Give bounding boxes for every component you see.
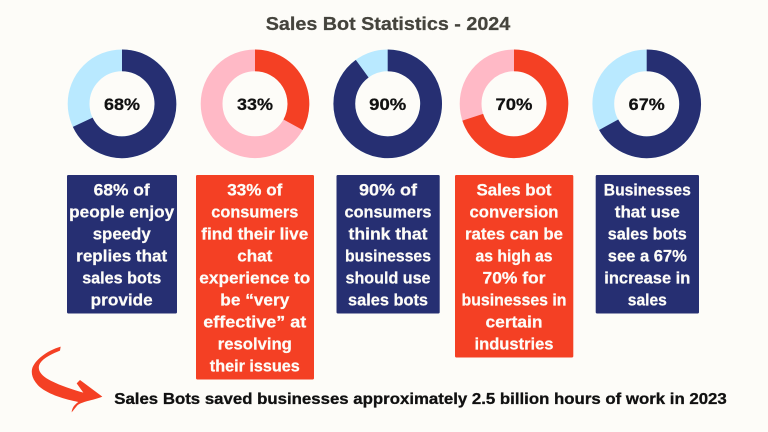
panel: 33% stat: effective” at — [203, 312, 307, 332]
panel: 33% stat: find their live — [201, 224, 308, 244]
donut chart: 70%: 70% — [496, 96, 533, 114]
donut chart: 70% — [471, 60, 557, 147]
panel: 33% stat: chat — [237, 246, 273, 266]
panel: 70% stat: certain — [486, 312, 542, 332]
panel: 68% stat: speedy — [93, 224, 151, 244]
panel: 67% stat: sales — [628, 290, 667, 310]
panel: 68% stat: 68% of — [94, 180, 150, 200]
panel: 33% stat: resolving — [218, 334, 292, 354]
panel: 68% stat: people enjoy — [69, 202, 175, 222]
panel: 67% stat — [596, 175, 699, 314]
panel: 70% stat: Sales bot — [476, 180, 552, 200]
panel: 67% stat: increase in — [604, 268, 690, 288]
title: Sales Bot Statistics - 2024 — [266, 13, 511, 34]
icon: curved red arrow — [32, 347, 102, 412]
panel: 33% stat: their issues — [210, 356, 300, 376]
panel: 70% stat: conversion — [470, 202, 558, 222]
panel: 70% stat — [455, 175, 573, 358]
donut chart: 33% — [212, 60, 298, 147]
donut chart: 68%: 68% — [104, 96, 140, 114]
donut chart: 33%: 33% — [237, 96, 273, 114]
panel: 67% stat: sales bots — [608, 224, 687, 244]
panel: 33% stat: experience to — [199, 268, 310, 288]
donut chart: 90% — [344, 60, 431, 147]
panel: 68% stat: provide — [91, 290, 153, 310]
panel: 70% stat: industries — [474, 334, 554, 354]
panel: 33% stat: 33% of — [227, 180, 283, 200]
donut chart: 67% — [603, 60, 690, 147]
panel: 67% stat: that use — [615, 202, 680, 222]
panel: 70% stat: as high as — [476, 246, 552, 266]
panel: 68% stat: replies that — [76, 246, 168, 266]
panel: 90% stat: businesses — [345, 246, 431, 266]
panel: 70% stat: 70% for — [482, 268, 546, 288]
callout: hours saved: Sales Bots saved businesses approximately 2.5 billion hours of work in 2023 — [114, 391, 727, 408]
panel: 67% stat: see a 67% — [608, 246, 687, 266]
panel: 90% stat: consumers — [344, 202, 432, 222]
donut chart: 67%: 67% — [629, 96, 665, 114]
panel: 33% stat: be “very — [220, 290, 290, 310]
panel: 33% stat: consumers — [211, 202, 298, 222]
panel: 70% stat: rates can be — [465, 224, 563, 244]
panel: 68% stat — [67, 175, 177, 314]
panel: 90% stat — [336, 175, 440, 314]
panel: 70% stat: businesses in — [462, 290, 566, 310]
donut chart: 90%: 90% — [369, 96, 407, 114]
donut chart: 68% — [79, 60, 165, 147]
panel: 33% stat — [196, 175, 314, 380]
panel: 67% stat: Businesses — [604, 180, 691, 200]
panel: 90% stat: think that — [348, 224, 428, 244]
panel: 90% stat: should use — [346, 268, 430, 288]
panel: 90% stat: 90% of — [359, 180, 417, 200]
panel: 90% stat: sales bots — [348, 290, 428, 310]
panel: 68% stat: sales bots — [82, 268, 161, 288]
